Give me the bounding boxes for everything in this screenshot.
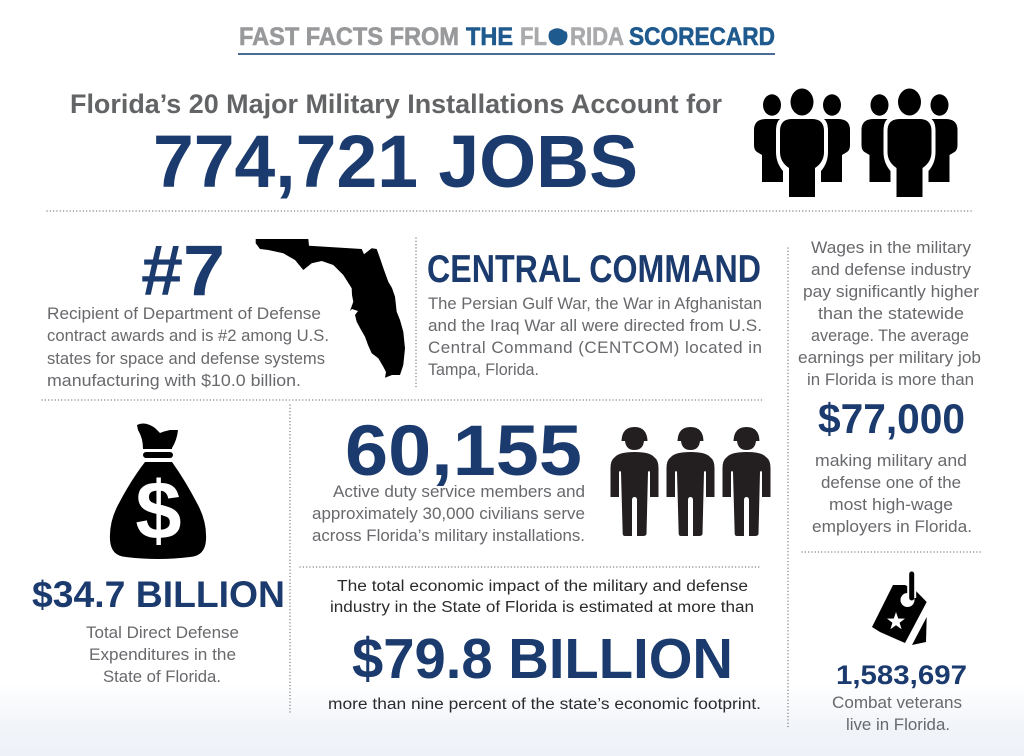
active duty caption: across Florida’s military installations. — [312, 526, 585, 545]
rank description: Recipient of Department of Defense — [47, 304, 321, 323]
active duty figure: 60,155 — [345, 412, 582, 491]
header: fast facts from the Florida Scorecard: THE — [466, 23, 513, 51]
impact intro text — [330, 578, 754, 616]
rank description: states for space and defense systems — [47, 349, 325, 368]
header: fast facts from the Florida Scorecard: FL — [520, 23, 547, 51]
panel: wages — [798, 238, 981, 536]
Central Command paragraph: Tampa, Florida. — [428, 360, 539, 379]
Central Command paragraph: The Persian Gulf War, the War in Afghanistan — [428, 294, 762, 313]
panel: active duty — [312, 412, 770, 545]
expenditures caption: Total Direct Defense — [86, 623, 239, 642]
wages intro text — [798, 238, 981, 389]
headline: installations account for: Florida’s 20 Major Military Installations Account for — [70, 89, 722, 119]
wages closing text: defense one of the — [821, 473, 961, 492]
wages intro text: and defense industry — [811, 260, 971, 279]
header: fast facts from the Florida Scorecard: FAST FACTS FROM — [239, 23, 459, 51]
header: fast facts from the Florida Scorecard: SCORECARD — [629, 23, 775, 51]
icon: money bag: $ — [135, 464, 182, 557]
impact figure: $79.8 BILLION — [352, 627, 733, 691]
veterans caption: Combat veterans — [832, 693, 962, 712]
wages intro text: earnings per military job — [798, 348, 981, 367]
impact intro text: The total economic impact of the military and defense — [337, 578, 748, 595]
icon: two groups of people — [754, 88, 958, 197]
panel: direct defense expenditures — [32, 424, 285, 686]
header: fast facts from the Florida Scorecard: RIDA — [570, 23, 624, 51]
wages closing text: employers in Florida. — [812, 517, 972, 536]
wages intro text: in Florida is more than — [807, 370, 974, 389]
expenditures caption: State of Florida. — [103, 667, 221, 686]
panel: combat veterans — [832, 574, 967, 734]
impact closing text: more than nine percent of the state’s economic footprint. — [328, 696, 761, 713]
Central Command paragraph: and the Iraq War all were directed from U.S. — [428, 316, 762, 335]
active duty caption: approximately 30,000 civilians serve — [312, 504, 585, 523]
panel: contract awards rank — [47, 232, 329, 390]
expenditures caption: Expenditures in the — [89, 645, 236, 664]
headline number: 774,721 jobs: 774,721 JOBS — [153, 120, 638, 203]
Central Command paragraph — [428, 294, 762, 379]
icon: map of Florida — [256, 239, 405, 378]
wages closing text: making military and — [815, 451, 967, 470]
rank description: contract awards and is #2 among U.S. — [47, 326, 329, 345]
impact intro text: industry in the State of Florida is estimated at more than — [330, 599, 754, 616]
icon: three service members — [610, 427, 770, 536]
rank number: #7 — [141, 232, 225, 311]
expenditures figure: $34.7 BILLION — [32, 574, 285, 615]
wages intro text: than the statewide — [818, 304, 964, 323]
rank description — [47, 304, 329, 390]
active duty caption — [312, 482, 585, 545]
veterans caption: live in Florida. — [846, 715, 950, 734]
wages intro text: pay significantly higher — [803, 282, 979, 301]
icon: dog tags — [872, 574, 927, 645]
active duty caption: Active duty service members and — [333, 482, 585, 501]
veterans caption — [832, 693, 962, 734]
wages closing text: most high-wage — [829, 495, 953, 514]
header: fast facts from the Florida Scorecard — [238, 23, 775, 55]
heading: Central Command: CENTRAL COMMAND — [427, 248, 761, 291]
veterans figure: 1,583,697 — [836, 660, 967, 690]
icon: money bag — [110, 424, 206, 559]
wages closing text — [812, 451, 972, 536]
panel: Central Command — [427, 248, 762, 379]
wages figure: $77,000 — [818, 395, 965, 442]
rank description: manufacturing with $10.0 billion. — [47, 371, 301, 390]
wages intro text: average. The average — [811, 326, 969, 345]
expenditures caption — [86, 623, 239, 686]
panel: economic impact — [328, 578, 761, 713]
wages intro text: Wages in the military — [811, 238, 971, 257]
Central Command paragraph: Central Command (CENTCOM) located in — [428, 338, 762, 357]
